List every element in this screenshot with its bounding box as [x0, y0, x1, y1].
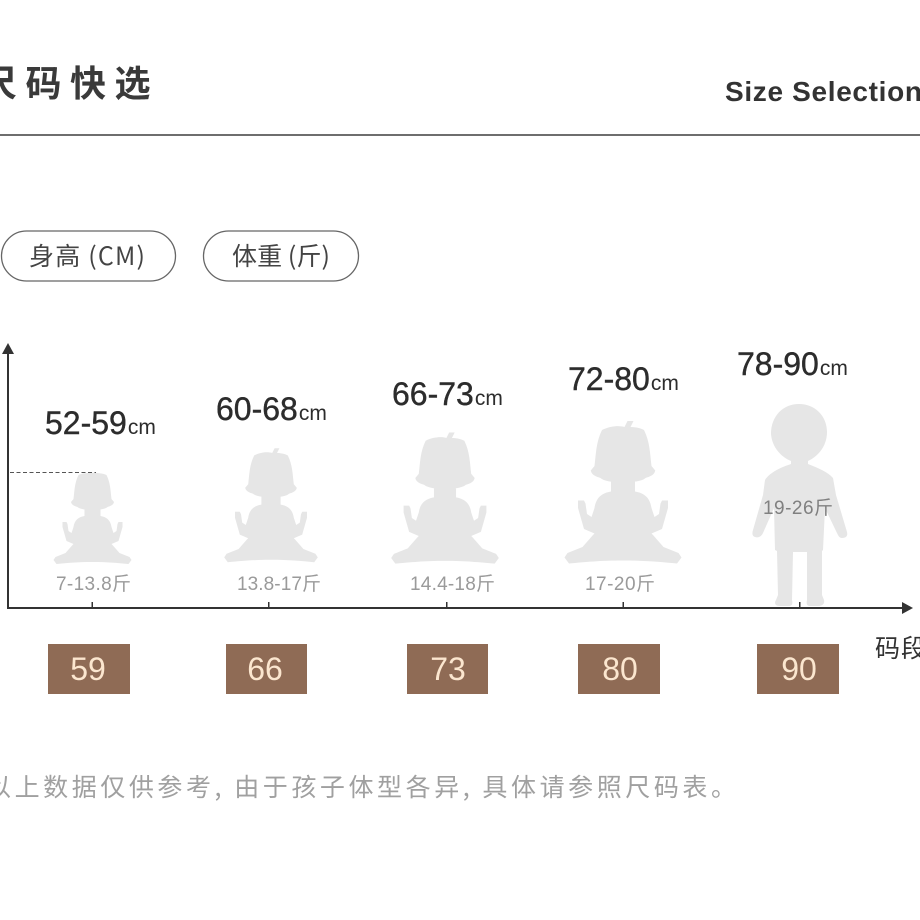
dashed height guide — [10, 472, 96, 474]
size badge: 90: 90 — [781, 651, 817, 687]
footnote: 以上数据仅供参考, 由于孩子体型各异, 具体请参照尺码表。 — [0, 768, 736, 804]
weight label: 17-20 jin: 17-20斤 — [585, 573, 655, 595]
chart: height and weight by size — [2, 343, 913, 614]
y axis with arrow — [2, 343, 14, 609]
size badge: 59 — [48, 644, 130, 694]
weight label: 7-13.8 jin: 7-13.8斤 — [56, 573, 131, 595]
size badge: 59: 59 — [70, 651, 106, 687]
height label: 66-73cm: 66-73cm — [392, 376, 503, 412]
weight label: 13.8-17 jin: 13.8-17斤 — [237, 573, 321, 595]
size badge: 90 — [757, 644, 839, 694]
x axis with arrow — [7, 602, 913, 614]
height label: 60-68cm: 60-68cm — [216, 391, 327, 427]
subtitle: Size Selection: Size Selection — [725, 76, 920, 107]
weight label: 19-26 jin: 19-26斤 — [763, 497, 833, 519]
silhouette: baby 3 — [391, 432, 499, 564]
silhouette: baby 1 — [54, 473, 132, 564]
silhouette: toddler — [752, 404, 847, 606]
pill: weight in jin: 体重 (斤) — [232, 237, 330, 273]
size badge: 66 — [226, 644, 307, 694]
size badge: 73: 73 — [430, 651, 466, 687]
pill: height in cm — [2, 231, 176, 281]
weight label: 14.4-18 jin: 14.4-18斤 — [410, 573, 495, 595]
height label: 52-59cm: 52-59cm — [45, 405, 156, 441]
silhouette: baby 2 — [224, 448, 318, 562]
size badge: 80: 80 — [602, 651, 638, 687]
silhouette: baby 4 — [564, 421, 682, 564]
size badge: 80 — [578, 644, 660, 694]
size badge: 73 — [407, 644, 488, 694]
height label: 78-90cm: 78-90cm — [737, 346, 848, 382]
pill: height in cm: 身高 (CM) — [29, 237, 145, 273]
header rule — [0, 134, 920, 136]
pill: weight in jin — [204, 231, 358, 281]
size badge: 66: 66 — [247, 651, 283, 687]
axis ticks — [92, 602, 800, 608]
height label: 72-80cm: 72-80cm — [568, 361, 679, 397]
